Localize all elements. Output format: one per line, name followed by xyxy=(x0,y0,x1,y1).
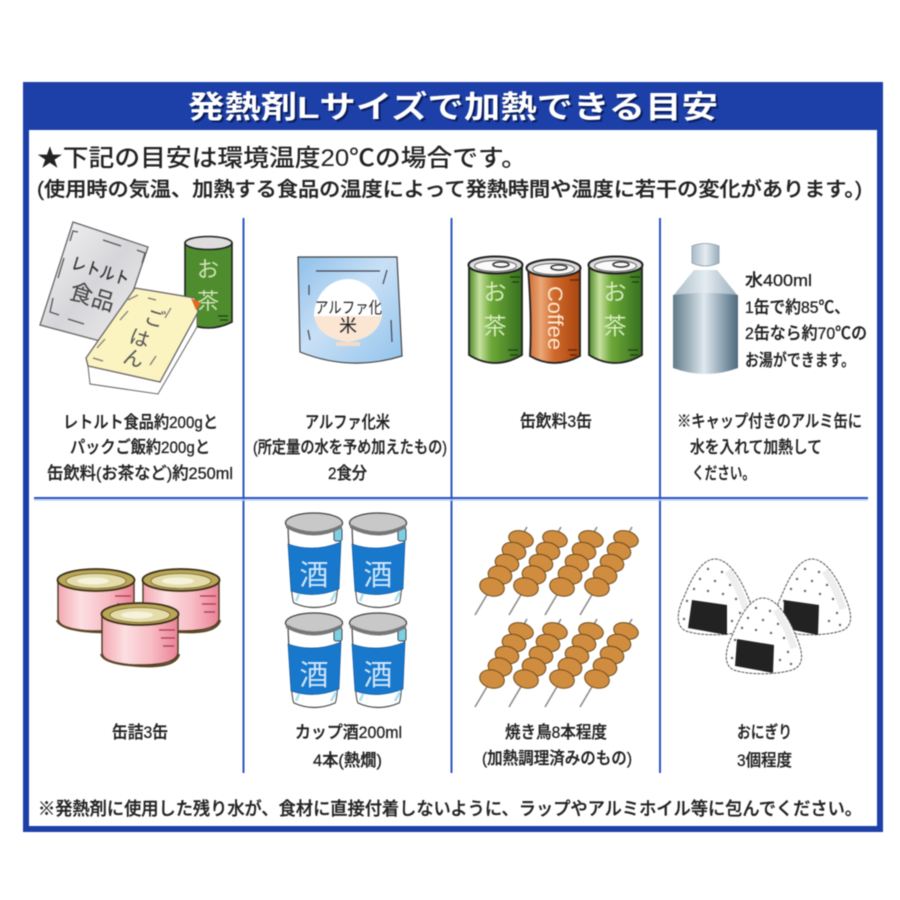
caption: 缶飲料(お茶など)約250ml xyxy=(47,464,233,483)
icon: sake cup 1 xyxy=(286,513,342,608)
caption xyxy=(482,723,632,768)
caption: ※キャップ付きのアルミ缶に xyxy=(677,412,862,431)
icon: sake cup 2 xyxy=(350,513,406,608)
icon: green tea can left xyxy=(468,256,522,363)
panel: water in aluminium bottle xyxy=(673,244,867,483)
icon: retort pouch xyxy=(40,222,148,345)
icon: rice bag: 米 xyxy=(339,316,357,336)
caption xyxy=(677,412,862,483)
frame xyxy=(26,85,880,829)
water text: 1缶で約85℃、 xyxy=(745,298,850,317)
grid lines xyxy=(34,218,868,773)
panel: retort food, rice pack, tea can xyxy=(40,222,233,483)
icon: retort pouch: 食品 xyxy=(67,278,118,316)
icon: green tea can left: 茶 xyxy=(484,313,506,339)
icon: tea can: 茶 xyxy=(197,289,219,314)
icon: rice pack xyxy=(86,288,201,394)
icon: sake cup 2: 酒 xyxy=(363,560,393,592)
icon: retort pouch: レトルト xyxy=(69,254,132,289)
icon: green tea can left: お xyxy=(484,279,506,305)
icon: sake cup 4: 酒 xyxy=(363,660,393,692)
icon: rice pack: ん xyxy=(121,346,146,373)
caption: パックご飯約200gと xyxy=(70,438,210,457)
footer note: ※発熱剤に使用した残り水が、食材に直接付着しないように、ラップやアルミホイル等に包んでください。 xyxy=(38,798,862,819)
icon: tea can xyxy=(185,236,232,328)
caption: (所定量の水を予め加えたもの) xyxy=(253,438,447,457)
water text: 水400ml xyxy=(745,271,812,290)
title band: 発熱剤Lサイズで加熱できる目安 xyxy=(188,90,718,125)
water text: お湯ができます。 xyxy=(745,350,855,370)
caption: おにぎり xyxy=(737,723,792,742)
caption: 2食分 xyxy=(328,464,367,483)
icon: tea can: お xyxy=(197,257,219,282)
caption: カップ酒200ml xyxy=(295,723,402,742)
icon: sake cup 1: 酒 xyxy=(299,560,329,592)
icon: rice pack: ご xyxy=(142,305,167,333)
icon: three tins xyxy=(57,569,220,666)
caption xyxy=(737,723,792,770)
icon: sake cup 3: 酒 xyxy=(299,660,329,692)
icon: rice bag xyxy=(298,257,402,363)
water text: 2缶なら約70℃の xyxy=(745,324,867,343)
caption xyxy=(295,723,402,770)
panel: alpha rice xyxy=(253,257,447,483)
panel: cup sake xyxy=(286,513,406,770)
icon: sake cup 4 xyxy=(350,613,406,708)
icon: three rice balls xyxy=(678,559,851,674)
caption: 3個程度 xyxy=(737,751,792,770)
title band xyxy=(23,82,883,130)
icon: green tea can right xyxy=(588,256,642,363)
intro text: ★下記の目安は環境温度20℃の場合です。 xyxy=(37,145,527,172)
caption: 缶詰3缶 xyxy=(112,723,168,742)
intro text xyxy=(37,145,862,201)
title band: 発熱剤Lサイズで加熱できる目安 xyxy=(190,92,720,127)
icon: green tea can right: 茶 xyxy=(604,313,626,339)
caption: ください。 xyxy=(692,464,755,483)
caption: 焼き鳥8本程度 xyxy=(505,723,607,742)
caption: (加熱調理済みのもの) xyxy=(482,749,632,768)
panel: onigiri xyxy=(678,559,851,770)
caption: レトルト食品約200gと xyxy=(63,413,218,432)
icon: rice pack: は xyxy=(127,326,152,353)
panel: canned drinks xyxy=(468,256,642,431)
panel: tinned food xyxy=(57,569,220,742)
caption xyxy=(47,413,233,483)
caption: 水を入れて加熱して xyxy=(690,438,822,457)
icon: sake cup 3 xyxy=(286,613,342,708)
water text xyxy=(745,271,867,370)
icon: aluminium bottle xyxy=(673,244,738,374)
caption xyxy=(253,413,447,483)
caption: 4本(熱燗) xyxy=(313,751,382,770)
icon: rice bag: アルファ化 xyxy=(315,299,382,317)
icon: eight skewers xyxy=(475,527,640,707)
caption: 缶飲料3缶 xyxy=(520,412,592,431)
icon: coffee can: Coffee xyxy=(543,286,566,350)
icon: green tea can right: お xyxy=(604,279,626,305)
caption: アルファ化米 xyxy=(305,413,390,432)
icon: coffee can xyxy=(526,260,580,363)
intro text: (使用時の気温、加熱する食品の温度によって発熱時間や温度に若干の変化があります。) xyxy=(37,178,862,201)
panel: yakitori xyxy=(475,527,640,768)
